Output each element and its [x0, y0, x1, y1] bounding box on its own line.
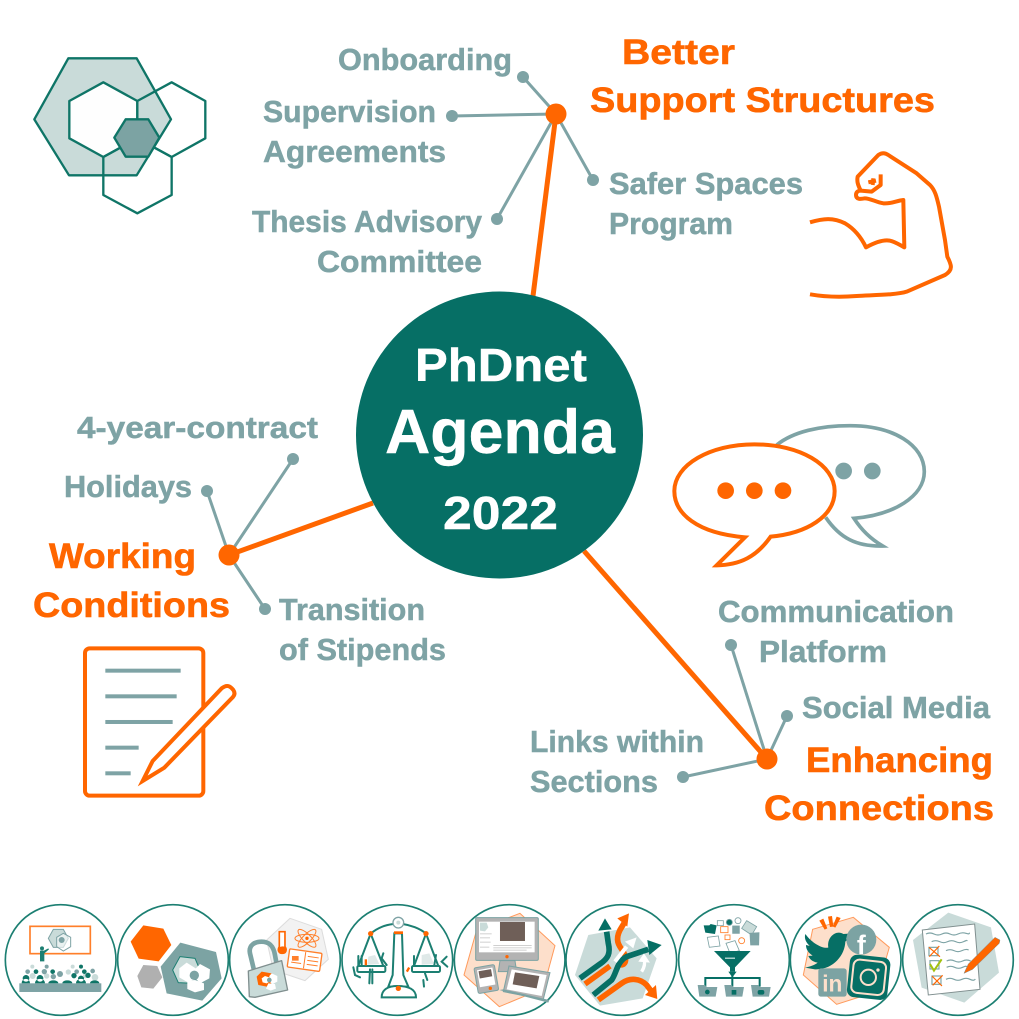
heading: better support structures: Better: [622, 33, 735, 72]
central circle: PhDnet Agenda 2022: PhDnet: [415, 339, 587, 391]
icon: social media logos: in: [822, 970, 842, 996]
label: holidays: Holidays: [64, 469, 192, 504]
heading: enhancing connections: Enhancing: [806, 741, 993, 780]
connector lines: working conditions: [201, 453, 373, 615]
label: links within sections: [530, 724, 704, 799]
heading: working conditions: Conditions: [33, 586, 230, 625]
heading: enhancing connections: [764, 741, 994, 828]
label: thesis advisory committee: [252, 204, 483, 279]
label: links within sections: Links within: [530, 724, 704, 759]
label: social media: Social Media: [802, 690, 991, 725]
label: transition of stipends: [279, 592, 446, 667]
icon: website on devices: [454, 905, 565, 1015]
label: communication platform: Communication: [718, 594, 954, 629]
central circle: PhDnet Agenda 2022: 2022: [443, 487, 558, 539]
label: communication platform: [718, 594, 954, 669]
label: onboarding: Onboarding: [338, 42, 512, 77]
label: transition of stipends: Transition: [279, 592, 425, 627]
label: 4-year-contract: 4-year-contract: [77, 410, 318, 445]
icon: social media logos: [790, 905, 901, 1015]
heading: working conditions: [33, 537, 230, 625]
label: transition of stipends: of Stipends: [279, 632, 446, 667]
icon: scales of justice: [342, 905, 453, 1015]
label: links within sections: Sections: [530, 764, 658, 799]
icon: crossing arrows: [566, 905, 677, 1015]
label: supervision agreements: Supervision: [263, 94, 436, 129]
label: supervision agreements: [263, 94, 446, 169]
label: thesis advisory committee: Thesis Advisory: [252, 204, 483, 239]
icon: orange and teal hexagons: [118, 905, 228, 1015]
label: safer spaces program: Program: [609, 206, 733, 241]
connector lines: enhancing connections: [584, 551, 793, 783]
label: safer spaces program: [609, 166, 803, 241]
label: supervision agreements: Agreements: [263, 134, 446, 169]
icon: hexagon logo: [34, 58, 205, 213]
heading: enhancing connections: Connections: [764, 789, 994, 828]
icon: speech bubbles: [674, 426, 924, 565]
label: communication platform: Platform: [759, 634, 887, 669]
icon: funnel into folders: [679, 905, 789, 1015]
icon: padlock and science: [230, 905, 340, 1015]
label: safer spaces program: Safer Spaces: [609, 166, 803, 201]
central circle: PhDnet Agenda 2022: [356, 292, 643, 578]
icon: document and pen: [85, 648, 235, 796]
icon: social media logos: f: [857, 930, 866, 960]
connector lines: better support structures: [446, 71, 599, 296]
icon: presentation to audience: [5, 905, 116, 1015]
heading: better support structures: [590, 33, 935, 120]
icon: checklist and pencil: [903, 905, 1013, 1015]
heading: working conditions: Working: [49, 537, 196, 576]
central circle: PhDnet Agenda 2022: Agenda: [385, 398, 616, 467]
label: thesis advisory committee: Committee: [317, 244, 482, 279]
icon: flexed arm: [810, 153, 951, 297]
heading: better support structures: Support Structures: [590, 81, 935, 120]
